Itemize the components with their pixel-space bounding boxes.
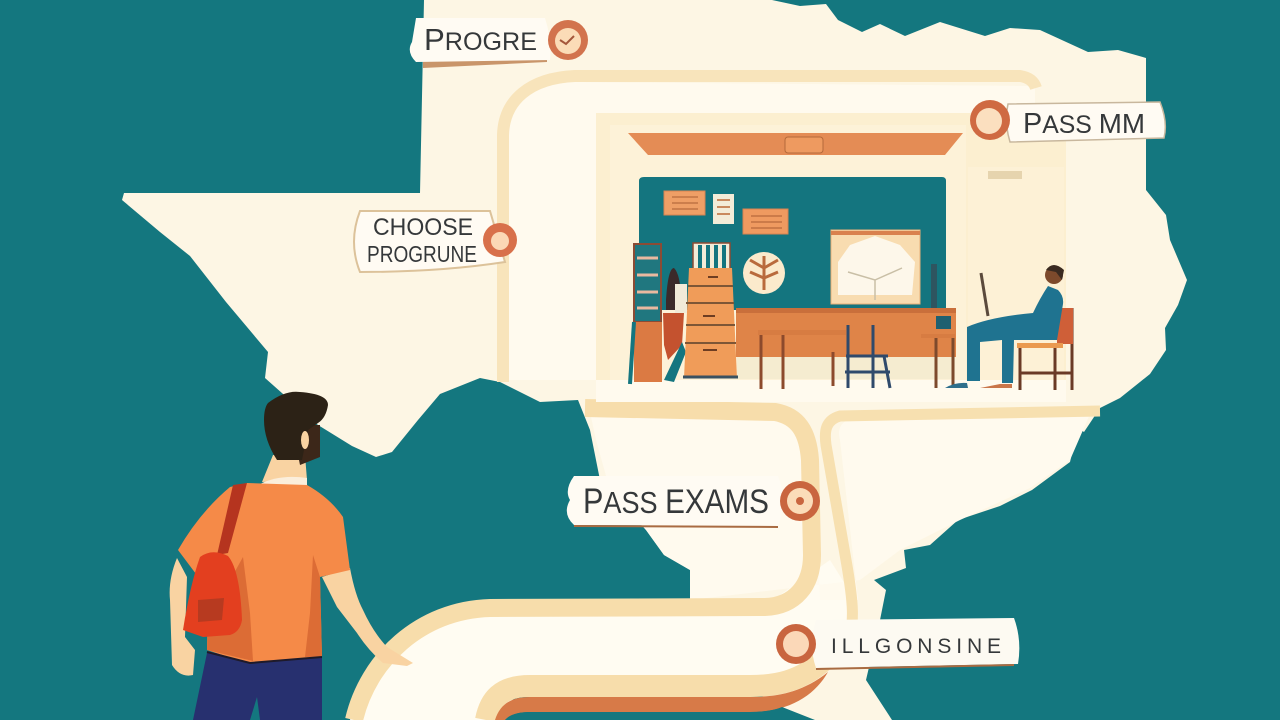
inner wall [610,125,966,387]
wall map picture [831,230,920,304]
head [1045,266,1063,284]
label plate [567,476,783,526]
ceiling valance [628,133,963,155]
shirt [178,483,350,663]
label text: PASS MM [1023,108,1145,140]
label: Pass Exams [567,476,820,527]
icon: pin badge [970,100,1010,140]
label: Licensing [776,618,1019,669]
icon: badge [483,223,517,257]
label text: ILLGONSINE [831,635,1001,658]
screen on desk [931,264,937,308]
icon: check badge [548,20,588,60]
road: lower white fill [590,412,1090,600]
chair [1020,308,1072,390]
side table [921,316,955,388]
label plate [354,211,505,272]
laptop [981,273,988,316]
valance lamp [785,137,823,153]
front table [758,330,846,389]
floor shadow [737,357,955,379]
road: lower right edge [825,411,1100,660]
ear [301,431,309,449]
body [967,286,1063,383]
side cabinet [630,244,662,384]
icon: badge [780,481,820,521]
person with backpack [170,392,413,720]
room wall [596,113,1066,388]
room illustration [596,113,1073,402]
teal below road [505,707,815,720]
backpack [183,552,242,637]
teal wall board [639,177,946,310]
belt line [207,652,322,663]
drawer stack [683,268,738,378]
hair [264,392,328,460]
collar [260,477,307,487]
beard [298,425,320,465]
wall round chart [743,252,785,294]
bag strap [217,483,247,555]
label: Progre [410,18,588,68]
label plate [812,618,1019,668]
door sign [988,171,1022,179]
floor [596,380,1066,402]
wall notice 2 [713,194,734,224]
trousers [193,653,322,720]
road: bottom edge [486,660,824,720]
bag pocket [198,598,224,622]
far arm [170,558,195,676]
label plate [410,18,550,62]
long desk [736,308,956,357]
label: Pass MM [970,100,1165,142]
neck [262,455,307,482]
wall notice 3 [743,209,788,234]
woman [663,268,687,382]
seated man [945,265,1073,390]
road: bottom white fill [350,560,860,720]
door panel [968,167,1064,385]
label text: PASS EXAMS [583,482,769,521]
label text line 1: CHOOSE [373,214,473,241]
shoes [945,383,968,388]
label shadow [423,50,547,68]
icon: badge [776,624,816,664]
bookcase top [693,243,730,269]
road: orange stripe [495,672,828,720]
road: top edge [503,76,1036,382]
chair [845,325,890,388]
label plate [1006,102,1165,142]
road: lower left edge [354,408,812,720]
label: Choose Program [354,211,517,272]
road: upper white fill [505,82,1035,380]
wall notice 1 [664,191,705,215]
near arm [322,568,413,666]
shirt shadow [207,557,253,661]
winding road [350,76,1100,720]
label text: PROGRE [424,22,537,57]
label text line 2: PROGRUNE [367,241,477,267]
